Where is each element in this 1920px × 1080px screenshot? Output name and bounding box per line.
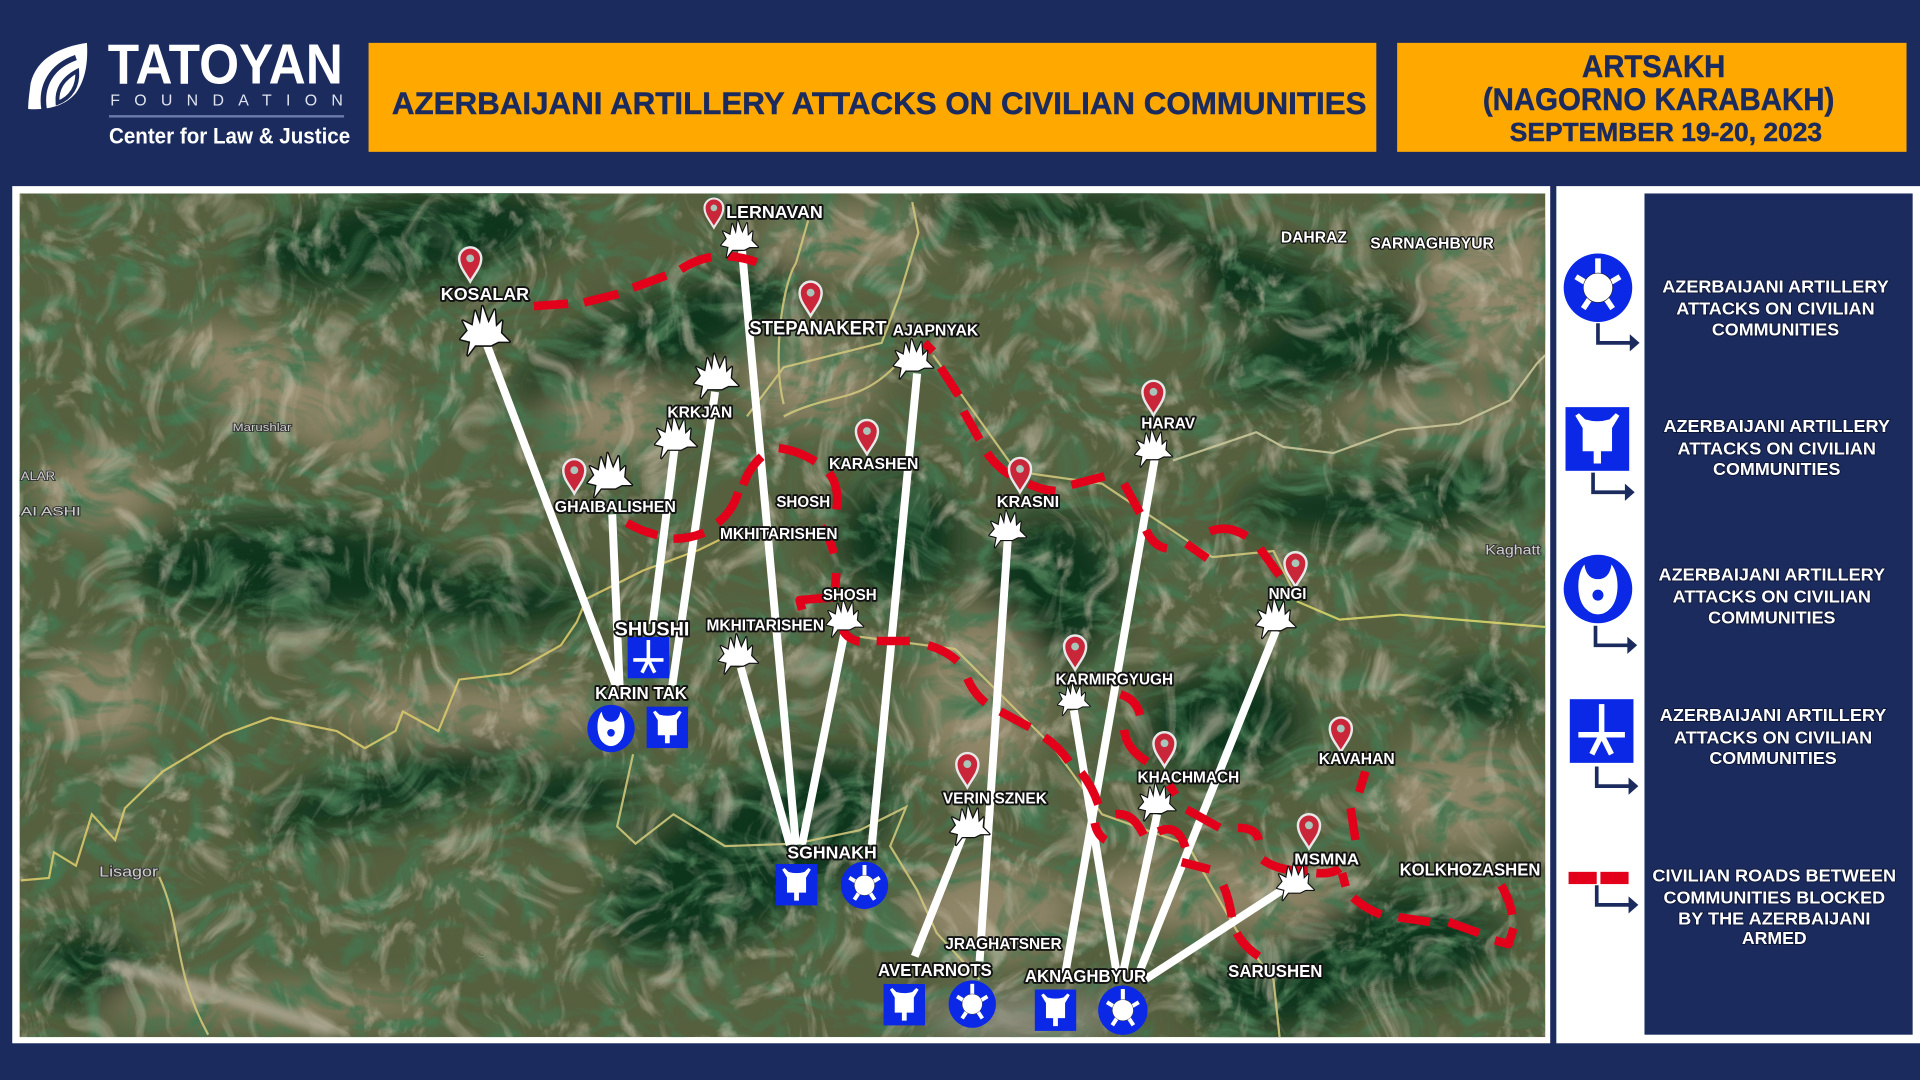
basemap place names: Lisagor (99, 865, 158, 881)
community labels: MKHITARISHEN (720, 526, 838, 543)
legend item: square trident symbol (1570, 699, 1886, 795)
attack lines (486, 251, 1286, 980)
legend item: blocked roads: BY THE AZERBAIJANI (1678, 908, 1870, 928)
logo tagline: Center for Law & Justice (109, 123, 350, 148)
legend item: square trident symbol: AZERBAIJANI ARTILLERY (1660, 705, 1886, 725)
community labels: MKHITARISHEN (707, 618, 824, 635)
community labels: KRKJAN (667, 405, 732, 422)
community labels: AVETARNOTS (878, 960, 992, 980)
legend item: blocked roads: ARMED (1742, 928, 1807, 948)
community labels: GHAIBALISHEN (555, 499, 676, 516)
community labels: KOSALAR (441, 284, 530, 304)
community labels: KARIN TAK (595, 683, 688, 703)
legend item: square trident symbol: COMMUNITIES (1709, 748, 1837, 768)
community labels: STEPANAKERT (749, 317, 887, 339)
community labels: HARAV (1141, 416, 1195, 433)
logo subtitle: FOUNDATION (110, 92, 343, 109)
region and date banner: SEPTEMBER 19-20, 2023 (1510, 119, 1822, 147)
community labels: KOLKHOZASHEN (1400, 860, 1540, 880)
community labels: KARASHEN (829, 456, 918, 473)
community labels: AJAPNYAK (893, 323, 979, 340)
panel: legend (1556, 186, 1920, 1043)
legend item: horned circle symbol: COMMUNITIES (1708, 607, 1836, 627)
basemap place names: Kaghatt (1485, 543, 1541, 558)
basemap place names: Marushlar (233, 422, 292, 434)
community labels: SHUSHI (615, 619, 689, 641)
community labels: SHOSH (823, 587, 877, 604)
logo: Tatoyan Foundation (28, 32, 350, 148)
community labels: VERIN SZNEK (943, 790, 1047, 807)
legend item: square trident symbol: ATTACKS ON CIVILIAN (1674, 727, 1872, 747)
community labels: MSMNA (1294, 851, 1360, 868)
legend item: blocked roads: CIVILIAN ROADS BETWEEN (1652, 866, 1896, 886)
region and date banner: (NAGORNO KARABAKH) (1483, 81, 1834, 117)
legend item: blocked roads (1569, 866, 1896, 948)
community labels: NNGI (1269, 586, 1307, 603)
community labels (441, 202, 1540, 986)
explosion markers (460, 220, 1314, 900)
artillery unit icons on map (587, 637, 1148, 1035)
icon: leaf (28, 43, 87, 109)
legend item: horned circle symbol: AZERBAIJANI ARTILLERY (1659, 564, 1885, 584)
title banner (369, 43, 1376, 152)
basemap place names (21, 422, 1541, 881)
region and date banner (1397, 43, 1907, 152)
title banner: AZERBAIJANI ARTILLERY ATTACKS ON CIVILIAN COMMUNITIES (392, 85, 1367, 121)
region and date banner: ARTSAKH (1582, 48, 1725, 84)
basemap place names: AI ASHI (21, 505, 81, 519)
community labels: AKNAGHBYUR (1025, 966, 1147, 986)
community labels: JRAGHATSNER (945, 936, 1062, 953)
blocked civilian roads (534, 256, 1513, 956)
community labels: SARNAGHBYUR (1370, 236, 1494, 253)
gray plain near Aknaghbyur (924, 994, 1120, 1043)
community labels: SHOSH (776, 494, 830, 511)
panel: map (12, 171, 1555, 1043)
community labels: DAHRAZ (1281, 229, 1347, 246)
legend item: square artillery symbol (1566, 407, 1890, 501)
legend item: square artillery symbol: AZERBAIJANI ARTILLERY (1663, 416, 1890, 436)
legend item: circle artillery symbol: AZERBAIJANI ARTILLERY (1662, 277, 1889, 297)
basemap place names: ALAR (21, 469, 55, 483)
satellite map background (20, 171, 1555, 1043)
community labels: SGHNAKH (787, 842, 877, 862)
location pins (459, 198, 1352, 849)
community labels: KAVAHAN (1319, 751, 1395, 768)
dry riverbed (107, 964, 332, 1030)
legend item: circle artillery symbol (1564, 253, 1889, 351)
legend item: horned circle symbol: ATTACKS ON CIVILIAN (1673, 586, 1871, 606)
legend item: blocked roads: COMMUNITIES BLOCKED (1663, 888, 1885, 908)
logo wordmark: TATOYAN (108, 32, 343, 95)
community labels: LERNAVAN (726, 202, 823, 222)
legend item: horned circle symbol (1564, 555, 1885, 654)
community labels: KHACHMACH (1138, 769, 1239, 786)
legend item: circle artillery symbol: COMMUNITIES (1712, 320, 1839, 340)
legend item: square artillery symbol: COMMUNITIES (1713, 459, 1841, 479)
map roads (21, 202, 1545, 1037)
community labels: SARUSHEN (1228, 961, 1322, 981)
community labels: KARMIRGYUGH (1056, 671, 1173, 688)
legend item: circle artillery symbol: ATTACKS ON CIVILIAN (1676, 299, 1875, 319)
legend item: square artillery symbol: ATTACKS ON CIVILIAN (1678, 438, 1876, 458)
community labels: KRASNI (997, 494, 1059, 511)
